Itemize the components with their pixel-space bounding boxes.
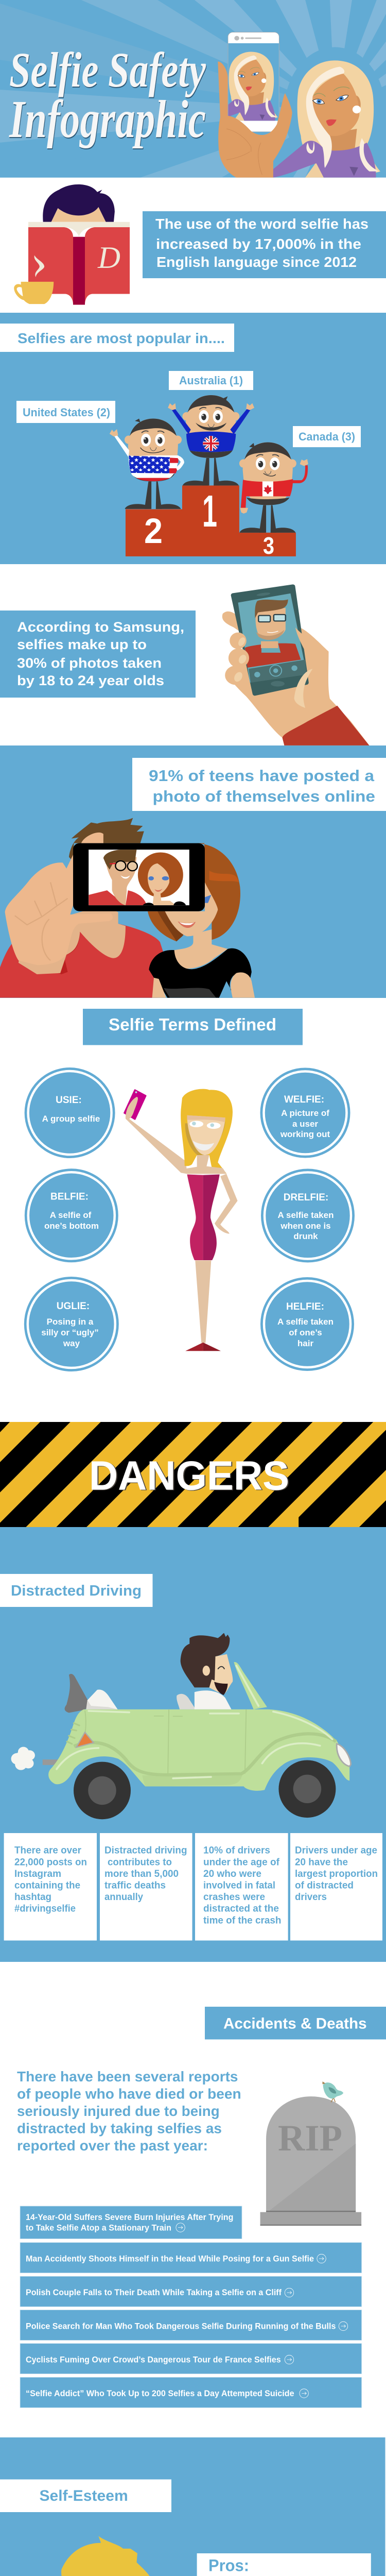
callout: Samsung statistic xyxy=(0,611,196,698)
illustration: woman in pink dress taking selfie xyxy=(125,1089,238,1351)
term circle: HELFIE: of one’s xyxy=(289,1328,322,1337)
panel: most popular countries: Canada (3) xyxy=(299,430,355,443)
illustration: hand holding phone with selfie xyxy=(222,586,369,745)
news item 3 xyxy=(20,2276,362,2307)
pros card xyxy=(197,2553,371,2576)
stat card 1: There are over xyxy=(14,1845,82,1856)
text block: several reports: There have been several reports xyxy=(17,2069,238,2084)
stat cards: distracted driving xyxy=(4,1833,382,1940)
term circle: DRELFIE: drunk xyxy=(293,1231,318,1241)
stat card 2: traffic deaths xyxy=(104,1880,166,1891)
hero background with rays xyxy=(0,0,386,178)
stat card 1: 22,000 posts on xyxy=(14,1857,87,1868)
stat card 2: contributes to xyxy=(108,1857,172,1868)
heading: Accidents & Deaths xyxy=(205,2007,386,2039)
term circle: UGLIE xyxy=(24,1277,119,1371)
stat card 3: time of the crash xyxy=(203,1916,281,1926)
term circle: USIE: A group selfie xyxy=(42,1114,100,1124)
text block: several reports: of people who have died or been xyxy=(17,2086,241,2102)
heading: Selfie Terms Defined xyxy=(83,1009,303,1045)
panel: most popular countries: Australia (1) xyxy=(179,374,243,387)
stat card 1: #drivingselfie xyxy=(14,1904,76,1914)
news item 6: “Selfie Addict” Who Took Up to 200 Selfies a Day Attempted Suicide xyxy=(26,2389,294,2398)
panel: most popular countries: Selfies are most popular in.... xyxy=(17,330,225,346)
stat card 4: largest proportion xyxy=(295,1869,378,1879)
term circle: BELFIE: A selfie of xyxy=(50,1210,92,1220)
stat card 3: 20 who were xyxy=(203,1869,261,1879)
title: Infographic xyxy=(9,90,206,149)
pros card: Pros: xyxy=(208,2556,249,2575)
illustration: laughing driver in green car xyxy=(11,1633,351,1819)
term circle: DRELFIE: DRELFIE: xyxy=(284,1192,328,1203)
stat card 2 xyxy=(100,1833,192,1940)
term circle: DRELFIE: A selfie taken xyxy=(278,1210,334,1220)
term circle: WELFIE: WELFIE: xyxy=(284,1094,324,1105)
stat card 2: Distracted driving xyxy=(104,1845,187,1856)
callout: Samsung statistic: According to Samsung, xyxy=(17,619,184,635)
text block: several reports xyxy=(17,2069,241,2154)
term circle: WELFIE: a user xyxy=(292,1119,318,1129)
term circle: DRELFIE: when one is xyxy=(280,1221,331,1231)
news item 1 xyxy=(20,2206,242,2239)
illustration: couple taking selfie xyxy=(0,818,255,998)
panel: most popular countries xyxy=(0,313,386,564)
panel: 91% of teens: photo of themselves online xyxy=(152,787,375,805)
stat card 3 xyxy=(195,1833,288,1940)
stat card 3: 10% of drivers xyxy=(203,1845,270,1856)
stat card 3: distracted at the xyxy=(203,1904,279,1914)
news item 1: 14-Year-Old Suffers Severe Burn Injuries After Trying xyxy=(26,2213,233,2222)
callout: Samsung statistic: 30% of photos taken xyxy=(17,655,162,671)
dangers banner: DANGERS xyxy=(89,1453,289,1498)
callout: Samsung statistic: by 18 to 24 year olds xyxy=(17,673,164,688)
news item 5 xyxy=(20,2344,362,2374)
illustration: person reading dictionary with coffee xyxy=(14,184,130,304)
panel: self-esteem xyxy=(0,2437,385,2576)
term circle: WELFIE: A picture of xyxy=(281,1108,329,1118)
term circle: UGLIE: silly or “ugly” xyxy=(41,1328,99,1337)
stat card 2: annually xyxy=(104,1892,143,1903)
panel: self-esteem: Self-Esteem xyxy=(39,2487,128,2504)
panel: 91% of teens xyxy=(0,745,386,998)
stat card 4: of distracted xyxy=(295,1880,354,1891)
panel: distracted driving: Distracted Driving xyxy=(11,1583,142,1599)
illustration: RIP gravestone with bird: RIP xyxy=(278,2117,342,2159)
stat card 3: involved in fatal xyxy=(203,1880,275,1891)
news item 2 xyxy=(20,2243,362,2273)
illustration: RIP gravestone with bird xyxy=(260,2081,361,2226)
stat card 1: containing the xyxy=(14,1880,80,1891)
stat card 4: Drivers under age xyxy=(295,1845,377,1856)
news item 4: Police Search for Man Who Took Dangerous Selfie During Running of the Bulls xyxy=(26,2321,336,2331)
news item 4 xyxy=(20,2310,362,2340)
dangers banner xyxy=(0,1422,386,1530)
callout: Samsung statistic: selfies make up to xyxy=(17,637,147,652)
news list xyxy=(20,2206,362,2408)
term circle: UGLIE: UGLIE: xyxy=(57,1301,90,1312)
term circle: USIE xyxy=(25,1067,115,1158)
term circle: BELFIE: BELFIE: xyxy=(50,1192,89,1202)
news item 5: Cyclists Fuming Over Crowd’s Dangerous Tour de France Selfies xyxy=(26,2355,281,2365)
stat card 1: hashtag xyxy=(14,1892,51,1903)
term circle: HELFIE: hair xyxy=(297,1338,313,1348)
term circle: BELFIE xyxy=(25,1168,118,1262)
news item 2: Man Accidently Shoots Himself in the Head While Posing for a Gun Selfie xyxy=(26,2255,314,2264)
stat card 4: 20 have the xyxy=(295,1857,348,1868)
news item 3: Polish Couple Falls to Their Death While Taking a Selfie on a Cliff xyxy=(26,2288,282,2297)
stat card 3: crashes were xyxy=(203,1892,265,1903)
podium with three characters: 1 xyxy=(202,486,217,536)
book letter D: D xyxy=(97,241,120,275)
illustration: woman taking selfie with phone xyxy=(215,32,380,178)
term circle: DRELFIE xyxy=(261,1168,355,1262)
title xyxy=(9,42,206,149)
text block: several reports: seriously injured due to being xyxy=(17,2103,220,2119)
term circle: HELFIE: A selfie taken xyxy=(277,1317,334,1327)
text block: several reports: distracted by taking selfies as xyxy=(17,2121,222,2137)
podium with three characters: 2 xyxy=(144,511,163,551)
term circle: USIE: USIE: xyxy=(56,1095,82,1106)
callout: use of the word selfie: The use of the word selfie has xyxy=(155,216,369,232)
callout: use of the word selfie: English language since 2012 xyxy=(156,254,357,270)
term circle: UGLIE: way xyxy=(63,1338,80,1348)
stat card 4 xyxy=(290,1833,382,1940)
term circle: HELFIE xyxy=(260,1277,354,1371)
callout: use of the word selfie: increased by 17,000% in the xyxy=(156,236,361,252)
term circle: HELFIE: HELFIE: xyxy=(286,1301,324,1312)
term circle: WELFIE: working out xyxy=(280,1129,330,1139)
podium with three characters: 3 xyxy=(263,532,274,559)
title: Selfie Safety xyxy=(9,42,206,97)
stat card 3: under the age of xyxy=(203,1857,280,1868)
callout: use of the word selfie xyxy=(143,211,386,278)
illustration: blond boy making peace sign xyxy=(22,2536,165,2576)
text block: several reports: reported over the past year: xyxy=(17,2138,208,2154)
term circle: WELFIE xyxy=(260,1067,350,1158)
stat card 1 xyxy=(4,1833,97,1940)
podium with three characters xyxy=(110,395,308,559)
stat card 1: Instagram xyxy=(14,1869,61,1879)
term circle: BELFIE: one’s bottom xyxy=(44,1221,99,1231)
news item 6 xyxy=(20,2377,362,2408)
heading: Selfie Terms Defined: Selfie Terms Defined xyxy=(109,1015,276,1034)
panel: 91% of teens: 91% of teens have posted a xyxy=(149,767,375,785)
term circle: UGLIE: Posing in a xyxy=(47,1317,94,1327)
heading: Accidents & Deaths: Accidents & Deaths xyxy=(223,2015,367,2032)
panel: distracted driving xyxy=(0,1527,386,1962)
panel: most popular countries: United States (2) xyxy=(23,406,110,419)
news item 1: to Take Selfie Atop a Stationary Train xyxy=(26,2224,171,2233)
stat card 2: more than 5,000 xyxy=(104,1869,179,1879)
stat card 4: drivers xyxy=(295,1892,327,1903)
